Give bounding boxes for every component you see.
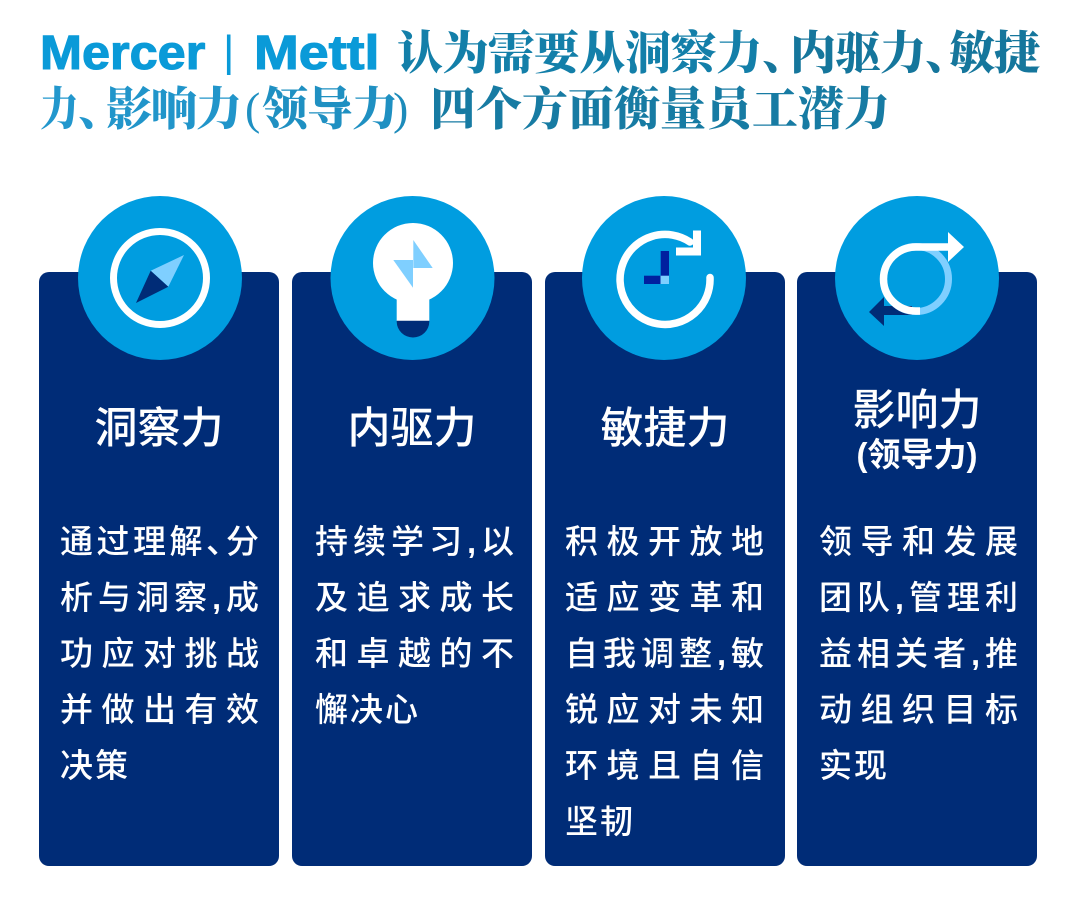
title: 四个方面衡量员工潜力: [430, 84, 890, 135]
text: 内驱力 description: 持续学习,以: [315, 522, 514, 560]
panel: 影响力: [797, 272, 1037, 866]
icon: compass: [78, 196, 242, 360]
text: 影响力 description: 益相关者,推: [819, 634, 1018, 672]
text: 敏捷力 description: [565, 522, 764, 840]
title: 敏捷: [949, 28, 1039, 79]
text: 影响力 description: 领导和发展: [819, 522, 1018, 560]
text: 洞察力 description: 决策: [60, 746, 130, 784]
text: 洞察力 description: 析与洞察,成: [60, 578, 259, 616]
text: 洞察力 description: 通过理解、分: [60, 522, 259, 560]
text: 敏捷力 description: 适应变革和: [565, 578, 764, 616]
title: [40, 27, 1040, 135]
text: 敏捷力 description: 坚韧: [565, 802, 635, 840]
text: 内驱力 description: 及追求成长: [315, 578, 514, 616]
text: 影响力 description: [819, 522, 1018, 784]
panel: 敏捷力: [545, 272, 785, 866]
text: 敏捷力 description: 锐应对未知: [565, 690, 764, 728]
heading: 内驱力: 内驱力: [348, 405, 476, 453]
sub-heading: 领导力: (领导力): [856, 436, 977, 473]
text: 洞察力 description: [60, 522, 259, 784]
text: 内驱力 description: 懈决心: [315, 690, 420, 728]
icon: light bulb: [330, 196, 494, 360]
icon: clock with arrow: [582, 196, 746, 360]
title: |: [223, 27, 234, 76]
title: 、: [925, 28, 971, 79]
panel: 洞察力: [39, 272, 279, 866]
title: Mettl: [254, 27, 379, 80]
text: 洞察力 description: 功应对挑战: [60, 634, 259, 672]
title: Mercer: [40, 27, 205, 80]
text: 敏捷力 description: 环境且自信: [565, 746, 764, 784]
title: 力: [40, 84, 79, 135]
text: 内驱力 description: 和卓越的不: [315, 634, 514, 672]
title: 、: [78, 84, 124, 135]
heading: 敏捷力: 敏捷力: [600, 405, 730, 453]
title: 影响力: [106, 84, 241, 135]
text: 敏捷力 description: 自我调整,敏: [565, 634, 764, 672]
text: 内驱力 description: [315, 522, 514, 728]
title: 领导力: [262, 84, 397, 135]
panel: 内驱力: [292, 272, 532, 866]
text: 敏捷力 description: 积极开放地: [565, 522, 764, 560]
heading: 洞察力: 洞察力: [94, 405, 224, 453]
text: 影响力 description: 实现: [819, 746, 889, 784]
text: 影响力 description: 团队,管理利: [819, 578, 1018, 616]
title: 认为需要从洞察力: [397, 28, 762, 79]
title: 、: [762, 28, 808, 79]
title: 内驱力: [790, 28, 925, 79]
heading: 影响力: 影响力: [852, 387, 982, 435]
text: 影响力 description: 动组织目标: [819, 690, 1018, 728]
text: 洞察力 description: 并做出有效: [60, 690, 259, 728]
title: ): [393, 83, 408, 134]
title: (: [245, 83, 260, 134]
icon: loop arrows: [835, 196, 999, 360]
